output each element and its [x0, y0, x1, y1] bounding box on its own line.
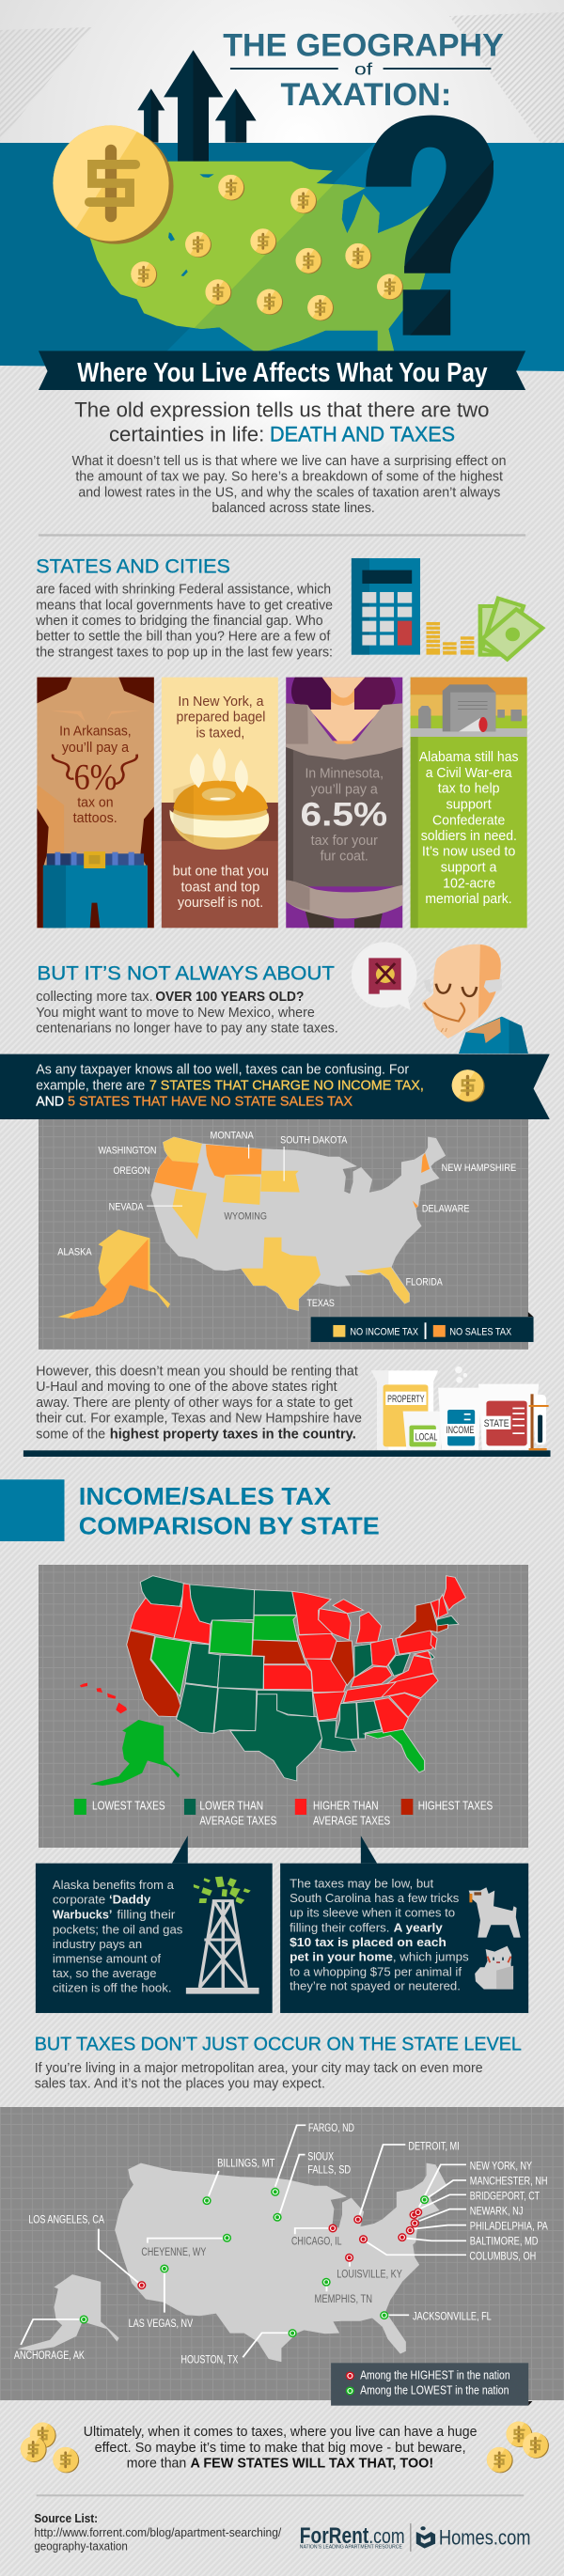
panel: Alabama memorial tax: 102-acre — [443, 876, 495, 891]
city labels: FALLS, SD — [307, 2162, 351, 2176]
city labels: NEWARK, NJ — [470, 2204, 523, 2217]
panel: Minnesota fur tax: fur coat. — [321, 850, 368, 864]
panel: Minnesota fur tax: you’ll pay a — [311, 782, 378, 797]
icon: ribbon coin — [452, 1069, 485, 1102]
map: green United States — [90, 162, 431, 351]
callout: South Carolina: The taxes may be low, but — [290, 1877, 433, 1891]
text: metropolitan paragraph: If you’re living in a major metropolitan area, your city may tack on even more — [35, 2061, 483, 2076]
city labels: HOUSTON, TX — [180, 2352, 239, 2365]
city labels — [14, 2121, 548, 2365]
panel: Alabama memorial tax: Confederate — [432, 813, 506, 828]
panel: Minnesota fur tax: tax for your — [311, 834, 378, 849]
text: source list: http://www.forrent.com/blog/apartment-searching/ — [34, 2526, 281, 2540]
text: conclusion: effect. So maybe it’s time to make that big move - but beware, — [95, 2441, 466, 2456]
text: source list — [34, 2512, 281, 2553]
panel: New York bagel tax: prepared bagel — [177, 710, 265, 725]
callout: South Carolina: to a whopping $75 per animal if — [290, 1965, 462, 1979]
text: intro paragraph: balanced across state lines. — [212, 501, 375, 516]
callout: Alaska — [36, 1835, 273, 2013]
illustration: tax beakers on shelf: LOCAL — [415, 1432, 437, 1443]
heading: states and cities: STATES AND CITIES — [36, 554, 230, 577]
icon: dog — [469, 1887, 521, 1938]
map: United States grey — [18, 2163, 446, 2362]
map: no tax states — [57, 1137, 446, 1319]
callout: Alaska: corporate — [53, 1893, 105, 1907]
callout: South Carolina — [280, 1835, 528, 2013]
heading: not always about: BUT IT’S NOT ALWAYS ABOUT — [37, 961, 335, 984]
text: conclusion: more than — [127, 2457, 186, 2471]
callout: Alaska: Alaska benefits from a — [53, 1879, 174, 1893]
legend: tax levels: HIGHEST TAXES — [418, 1799, 493, 1812]
map labels: FLORIDA — [406, 1275, 443, 1288]
icon: question mark — [366, 116, 494, 336]
callout: Alaska: filling their — [117, 1908, 176, 1922]
city labels: BILLINGS, MT — [217, 2156, 274, 2169]
panel: Alabama memorial tax: Alabama still has — [419, 750, 519, 765]
panel: Alabama memorial tax: It’s now used to — [422, 845, 516, 859]
map labels — [57, 1129, 516, 1309]
city labels: SIOUX — [307, 2149, 334, 2162]
text: metropolitan paragraph: sales tax. And it’s not the places you may expect. — [35, 2077, 325, 2091]
text: states and cities paragraph: better to settle the bill than you? Here are a few of — [36, 630, 331, 644]
callout: South Carolina: , which jumps — [393, 1950, 469, 1964]
map labels: DELAWARE — [422, 1202, 469, 1214]
title: TAXATION: — [281, 76, 451, 112]
legend: tax levels: LOWEST TAXES — [92, 1799, 165, 1812]
callout: Alaska: Warbucks’ — [53, 1908, 112, 1922]
icons: small coins on map — [131, 175, 403, 320]
panel: no income or sales tax map — [39, 1119, 534, 1350]
city labels: MEMPHIS, TN — [314, 2292, 372, 2305]
callout: Alaska: tax, so the average — [53, 1967, 156, 1981]
logo: ForRent.com: .com — [368, 2525, 405, 2549]
text: intro lead: DEATH AND TAXES — [270, 424, 455, 446]
map: state tax levels — [80, 1576, 466, 1786]
callout: Alaska: citizen is off the hook. — [53, 1981, 172, 1995]
panel: Arkansas tattoo tax: you’ll pay a — [62, 741, 129, 756]
city labels: LOUISVILLE, KY — [337, 2267, 402, 2280]
legend: tax levels: AVERAGE TAXES — [199, 1814, 276, 1827]
city labels: DETROIT, MI — [408, 2139, 460, 2152]
panel: New York bagel tax: yourself is not. — [178, 896, 263, 911]
callout: South Carolina: A yearly — [394, 1921, 443, 1935]
logo: Homes.com — [416, 2526, 530, 2550]
banner: taxpayer ribbon: 7 STATES THAT CHARGE NO INCOME TAX, — [149, 1078, 424, 1093]
panel: Arkansas tattoo tax: tattoos. — [73, 811, 118, 826]
city labels: JACKSONVILLE, FL — [413, 2309, 492, 2322]
panel: Arkansas tattoo tax: In Arkansas, — [59, 725, 132, 739]
banner: subtitle ribbon — [39, 351, 525, 390]
legend: tax levels: LOWER THAN — [199, 1799, 263, 1812]
text: conclusion: A FEW STATES WILL TAX THAT, TOO! — [190, 2457, 433, 2471]
legend: highest and lowest cities: Among the LOWEST in the nation — [360, 2384, 509, 2396]
map labels: WYOMING — [224, 1210, 267, 1222]
legend: tax levels: HIGHER THAN — [313, 1799, 379, 1812]
heading: income/sales tax comparison: COMPARISON BY STATE — [79, 1512, 380, 1539]
panel: Arkansas tattoo tax — [37, 678, 154, 928]
text: states and cities paragraph: means that local governments have to get creative — [36, 598, 333, 613]
text: intro lead: certainties in life: — [109, 424, 264, 446]
panel: New York bagel tax: In New York, a — [178, 695, 264, 710]
text: property taxes paragraph: away. There are plenty of other ways for a state to get — [36, 1396, 353, 1411]
logo: ForRent.com: ForRent — [300, 2524, 369, 2549]
legend: tax levels — [74, 1799, 493, 1827]
text: states and cities paragraph — [35, 583, 333, 660]
panel: Alabama memorial tax: support a — [441, 861, 497, 875]
icon: calculator — [352, 558, 420, 655]
banner: taxpayer ribbon — [0, 1054, 550, 1119]
panel: New York bagel tax: is taxed, — [196, 726, 244, 741]
icon: cash bills — [480, 599, 542, 660]
text: New Mexico paragraph: OVER 100 YEARS OLD? — [155, 990, 304, 1005]
icons: closing coins left — [21, 2423, 79, 2473]
leader lines — [21, 2125, 466, 2357]
panel: city sales tax map — [0, 2107, 564, 2400]
city labels: LAS VEGAS, NV — [129, 2317, 193, 2330]
map labels: OREGON — [114, 1164, 150, 1177]
panel: Alabama memorial tax: tax to help — [438, 782, 500, 796]
text: source list: Source List: — [34, 2512, 98, 2526]
icon: large dollar coin — [53, 125, 174, 244]
panel: state tax comparison map — [39, 1565, 528, 1848]
map labels: WASHINGTON — [98, 1144, 156, 1156]
city markers — [80, 2188, 429, 2337]
text: New Mexico paragraph: You might want to move to New Mexico, where — [36, 1006, 315, 1021]
city labels: NEW YORK, NY — [470, 2159, 532, 2172]
panel: Arkansas tattoo tax: 6% — [73, 757, 117, 798]
city labels: CHICAGO, IL — [291, 2234, 342, 2247]
text: New Mexico paragraph — [36, 990, 338, 1036]
illustration: tax beakers on shelf: STATE — [484, 1419, 509, 1429]
panel: Arkansas tattoo tax: tax on — [77, 795, 114, 810]
map labels: ALASKA — [57, 1245, 92, 1257]
icon: oil rig with cash — [186, 1877, 259, 1994]
legend: no income and sales tax: NO SALES TAX — [449, 1325, 511, 1337]
icon: cat — [475, 1946, 513, 1990]
text: conclusion — [84, 2425, 478, 2471]
icon: speech bubble with New Mexico — [352, 942, 417, 1010]
panel: Alabama memorial tax: soldiers in need. — [421, 829, 517, 844]
panel: Minnesota fur tax: In Minnesota, — [306, 766, 384, 781]
logo: ForRent.com: NATION’S LEADING APARTMENT RESOURCE — [300, 2545, 402, 2550]
panel: Alabama memorial tax: a Civil War-era — [426, 766, 512, 781]
logo: Homes.com: Homes.com — [439, 2527, 530, 2550]
callout: Alaska: industry pays an — [53, 1938, 142, 1952]
heading: income/sales tax comparison — [0, 1479, 380, 1541]
map labels: NEVADA — [109, 1200, 144, 1212]
banner: taxpayer ribbon: example, there are — [36, 1078, 145, 1093]
legend: no income and sales tax — [311, 1312, 534, 1342]
callout: Alaska: ‘Daddy — [109, 1893, 150, 1907]
callout: South Carolina: $10 tax is placed on each — [290, 1936, 446, 1950]
text: conclusion: Ultimately, when it comes to taxes, where you live can have a huge — [84, 2425, 478, 2440]
panel: Alabama memorial tax: memorial park. — [425, 892, 512, 907]
city labels: LOS ANGELES, CA — [28, 2212, 104, 2225]
city labels: ANCHORAGE, AK — [14, 2349, 85, 2362]
map labels: SOUTH DAKOTA — [280, 1133, 348, 1146]
legend: tax levels: AVERAGE TAXES — [313, 1814, 390, 1827]
legend: highest and lowest cities: Among the HIGHEST in the nation — [360, 2369, 510, 2381]
panel: New York bagel tax — [162, 678, 278, 928]
city labels: CHEYENNE, WY — [141, 2245, 207, 2258]
illustration: tax beakers on shelf — [24, 1366, 551, 1457]
text: intro lead: The old expression tells us that there are two — [74, 399, 489, 422]
text: states and cities paragraph: when it comes to bridging the financial gap. Who — [35, 614, 323, 629]
text: property taxes paragraph: U-Haul and moving to one of the above states right — [36, 1380, 337, 1395]
callout: South Carolina: up its sleeve when it comes to — [290, 1906, 455, 1920]
title: THE GEOGRAPHY — [223, 27, 504, 63]
banner: taxpayer ribbon: AND — [36, 1095, 64, 1109]
panel: New York bagel tax: toast and top — [180, 880, 260, 895]
panel: Alabama memorial tax: support — [446, 797, 492, 812]
map labels: MONTANA — [210, 1129, 254, 1141]
map labels: NEW HAMPSHIRE — [442, 1162, 516, 1174]
text: intro lead — [74, 399, 489, 446]
text: metropolitan paragraph — [35, 2061, 483, 2091]
legend: no income and sales tax: NO INCOME TAX — [350, 1325, 418, 1337]
heading: income/sales tax comparison: INCOME/SALES TAX — [79, 1483, 331, 1510]
title — [223, 27, 504, 112]
text: source list: geography-taxation — [34, 2539, 128, 2553]
panel: New York bagel tax: but one that you — [173, 865, 269, 879]
icon: coin stacks — [426, 622, 474, 655]
banner: taxpayer ribbon: 5 STATES THAT HAVE NO STATE SALES TAX — [68, 1095, 352, 1109]
text: intro paragraph — [72, 454, 506, 516]
illustration: tax beakers on shelf: INCOME — [446, 1426, 475, 1436]
callout: South Carolina: pet in your home — [290, 1950, 393, 1964]
text: property taxes paragraph: their cut. For example, Texas and New Hampshire have — [36, 1412, 362, 1426]
panel: Minnesota fur tax — [286, 678, 402, 928]
text: property taxes paragraph: highest property taxes in the country. — [110, 1428, 356, 1442]
legend: highest and lowest cities — [331, 2363, 532, 2406]
illustration: tax beakers on shelf: PROPERTY — [387, 1395, 425, 1405]
text: property taxes paragraph: some of the — [36, 1428, 105, 1442]
icon: old man — [422, 945, 528, 1054]
banner: taxpayer ribbon: As any taxpayer knows all too well, taxes can be confusing. For — [36, 1063, 409, 1077]
title: of — [354, 60, 373, 79]
text: property taxes paragraph: However, this doesn’t mean you should be renting that — [36, 1364, 358, 1379]
callout: Alaska: pockets; the oil and gas — [53, 1923, 182, 1937]
callout: Alaska: immense amount of — [53, 1952, 161, 1966]
text: property taxes paragraph — [36, 1364, 362, 1442]
panel: Minnesota fur tax: 6.5% — [301, 796, 387, 833]
panel: hero header — [0, 0, 564, 371]
text: New Mexico paragraph: collecting more tax. — [36, 990, 153, 1005]
icon: rising arrows — [137, 50, 256, 162]
callout: South Carolina: South Carolina has a few tricks — [290, 1892, 459, 1906]
map labels: TEXAS — [306, 1297, 335, 1309]
panel: Alabama memorial tax — [411, 678, 527, 928]
text: states and cities paragraph: the strangest taxes to pop up in the last few years: — [36, 645, 333, 660]
city labels: FARGO, ND — [308, 2121, 354, 2134]
icons: closing coins right — [487, 2422, 549, 2473]
callout: South Carolina: filling their coffers. — [290, 1921, 389, 1935]
text: states and cities paragraph: are faced with shrinking Federal assistance, which — [36, 583, 331, 597]
callout: South Carolina: they’re not spayed or neutered. — [290, 1979, 461, 1993]
text: New Mexico paragraph: centenarians no longer have to pay any state taxes. — [36, 1022, 338, 1036]
